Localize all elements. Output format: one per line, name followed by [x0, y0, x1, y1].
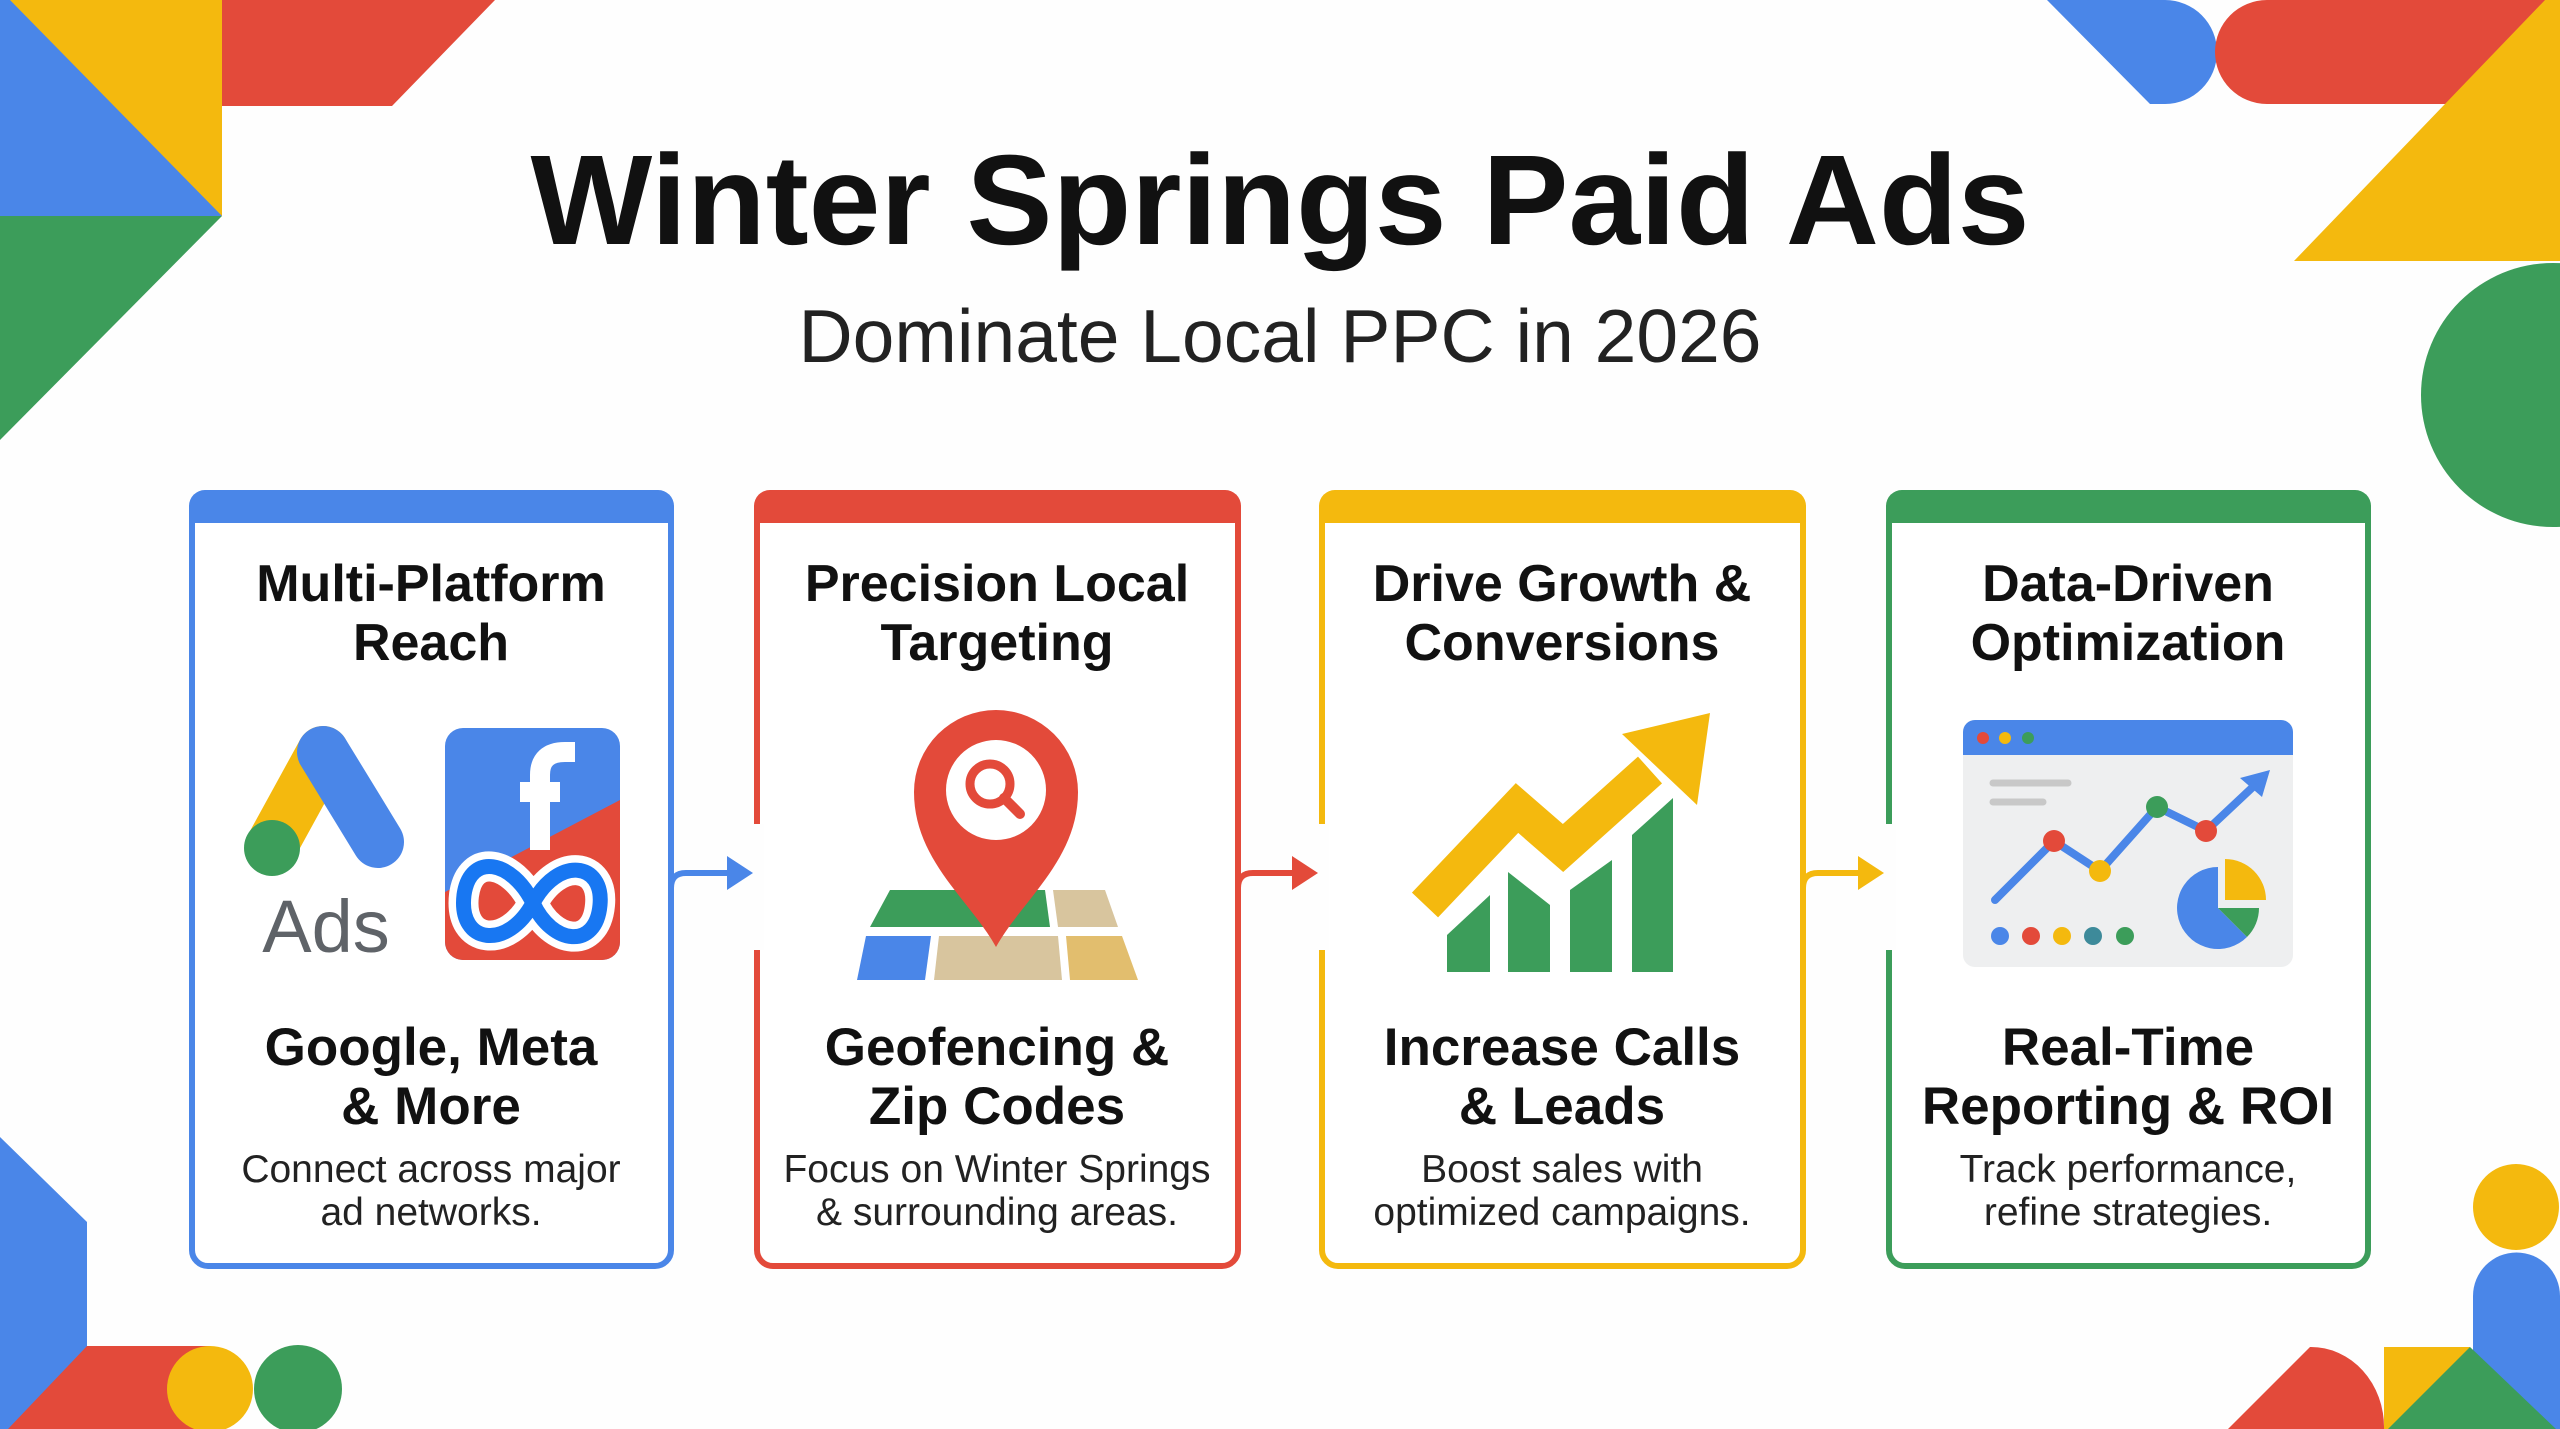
description: Connect across major [241, 1148, 621, 1191]
icon: google ads [244, 752, 390, 968]
subheading [265, 1018, 598, 1136]
heading [256, 555, 606, 672]
description: refine strategies. [1984, 1191, 2272, 1234]
description [241, 1148, 621, 1234]
subheading: Google, Meta [265, 1018, 598, 1077]
heading: Reach [353, 614, 509, 672]
heading [805, 555, 1189, 672]
subheading: & Leads [1459, 1077, 1665, 1136]
arrow: card 2 to card 3 [1238, 856, 1318, 955]
heading: Multi-Platform [256, 555, 606, 613]
icon: google ads: Ads [262, 885, 390, 968]
subheading [1384, 1018, 1740, 1136]
subheading: Geofencing & [825, 1018, 1169, 1077]
subtitle: Dominate Local PPC in 2026 [798, 294, 1762, 378]
icon: growth chart [1425, 713, 1710, 972]
description [1373, 1148, 1751, 1234]
subheading: Zip Codes [869, 1077, 1125, 1136]
arrow: card 1 to card 2 [671, 856, 753, 955]
heading: Targeting [880, 614, 1114, 672]
heading: Conversions [1405, 614, 1719, 672]
heading [1373, 555, 1751, 672]
heading: Drive Growth & [1373, 555, 1751, 613]
decoration: top-left corner shapes [0, 0, 495, 440]
subheading [825, 1018, 1169, 1136]
icon: map pin over map [857, 710, 1138, 980]
decoration: bottom-left corner shapes [0, 1137, 342, 1429]
description [783, 1148, 1211, 1234]
icon: analytics dashboard [1963, 720, 2293, 967]
heading: Precision Local [805, 555, 1189, 613]
arrow: card 3 to card 4 [1803, 856, 1884, 955]
icon: meta/facebook [445, 728, 620, 960]
description: Focus on Winter Springs [783, 1148, 1211, 1191]
subheading [1922, 1018, 2334, 1136]
panel: precision local targeting [750, 490, 1241, 1266]
subheading: Increase Calls [1384, 1018, 1740, 1077]
panel: multi-platform reach [189, 490, 674, 1266]
heading: Data-Driven [1982, 555, 2274, 613]
subheading: Reporting & ROI [1922, 1077, 2334, 1136]
description: Track performance, [1960, 1148, 2296, 1191]
subheading: Real-Time [2002, 1018, 2254, 1077]
description: ad networks. [320, 1191, 542, 1234]
heading: Optimization [1971, 614, 2285, 672]
subheading: & More [341, 1077, 521, 1136]
heading [1971, 555, 2285, 672]
decoration: top-right corner shapes [2047, 0, 2560, 527]
decoration: bottom-right corner shapes [2228, 1164, 2560, 1429]
description: Boost sales with [1421, 1148, 1703, 1191]
title: Winter Springs Paid Ads [530, 129, 2030, 272]
panel: drive growth & conversions [1315, 490, 1806, 1266]
description: optimized campaigns. [1373, 1191, 1751, 1234]
description: & surrounding areas. [816, 1191, 1178, 1234]
description [1960, 1148, 2296, 1234]
panel: data-driven optimization [1882, 490, 2371, 1266]
